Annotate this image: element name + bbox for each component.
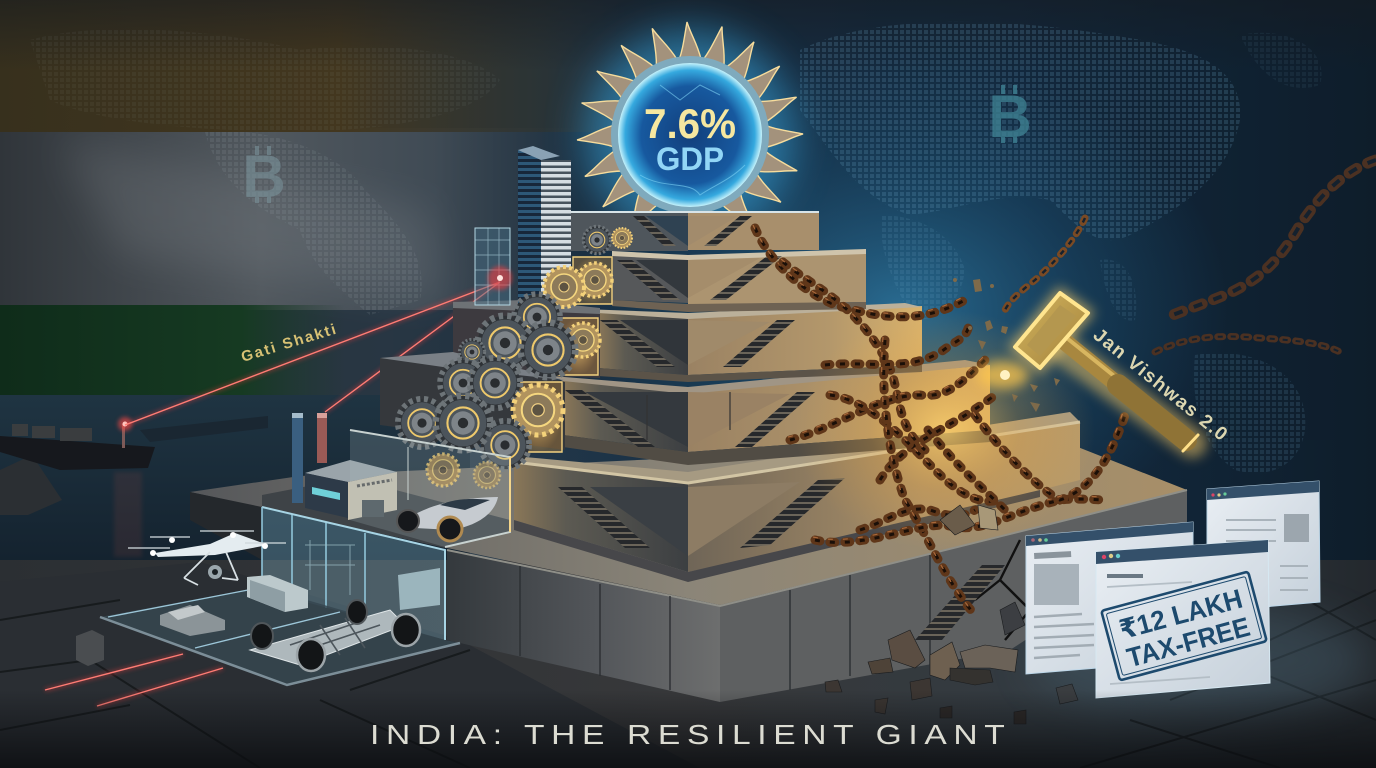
red laser lines — [45, 282, 500, 706]
battery unit small — [160, 605, 225, 636]
stepped pyramid — [190, 212, 1187, 702]
gears cluster — [398, 226, 632, 469]
factory ledge — [262, 478, 510, 548]
skyline towers — [475, 146, 571, 305]
value: 7.6%: 7.6% — [644, 100, 736, 147]
label: Gati Shakti: Gati Shakti — [239, 321, 338, 366]
crate — [76, 630, 104, 666]
factory building — [305, 460, 397, 520]
flying debris and sparks — [953, 278, 1060, 412]
glass factory showcase — [76, 413, 510, 685]
bottom vignette — [0, 690, 1376, 768]
drone — [128, 531, 286, 585]
hammer handle — [1065, 342, 1186, 440]
label: GDP: GDP — [656, 141, 724, 177]
icon: bitcoin symbol left: B — [242, 143, 286, 210]
tier 1 — [571, 212, 819, 251]
concept car — [397, 497, 498, 541]
golden hammer — [1015, 293, 1198, 451]
stamp: 12 Lakh tax-free — [1101, 572, 1267, 680]
harbour sea — [0, 395, 470, 595]
hammer head — [1015, 293, 1088, 368]
title: INDIA: THE RESILIENT GIANT — [370, 719, 1005, 750]
web document front with tax stamp — [1096, 540, 1270, 698]
web document back — [1207, 481, 1320, 612]
tower: glass skyscraper — [518, 146, 571, 305]
rubble pile — [825, 505, 1078, 724]
rust chains on the pyramid — [753, 225, 1125, 615]
dark left wings of the tiers — [380, 300, 600, 450]
world map made of dots — [30, 22, 1322, 473]
EV chassis — [250, 600, 420, 671]
cargo ship — [0, 417, 155, 470]
paved floor — [0, 560, 1376, 768]
tier 3 — [556, 303, 922, 382]
tier 4 — [552, 360, 990, 465]
sun with GDP orb — [577, 22, 803, 240]
icon: bitcoin symbol right: B — [988, 83, 1032, 150]
chimneys — [292, 413, 327, 503]
golden impact glow — [795, 310, 1095, 550]
floor panel — [100, 587, 460, 685]
stamp: 12 Lakh tax-free: ₹12 LAKH — [1116, 584, 1246, 645]
tier 5 — [514, 412, 1080, 582]
tower: wireframe building — [475, 228, 510, 305]
broken chains flying right — [1005, 160, 1376, 352]
label: Jan Vishwas 2.0: Jan Vishwas 2.0 — [1089, 325, 1231, 445]
tier 2 — [612, 249, 866, 312]
lit gear panels — [515, 257, 612, 452]
battery unit — [247, 575, 308, 612]
upper glass case — [350, 430, 510, 547]
lower glass room — [262, 507, 445, 640]
tier: foundation plinth — [190, 440, 1187, 702]
stamp: 12 Lakh tax-free: TAX-FREE — [1124, 612, 1253, 673]
sun rays — [576, 22, 804, 211]
web document middle — [1026, 522, 1193, 674]
